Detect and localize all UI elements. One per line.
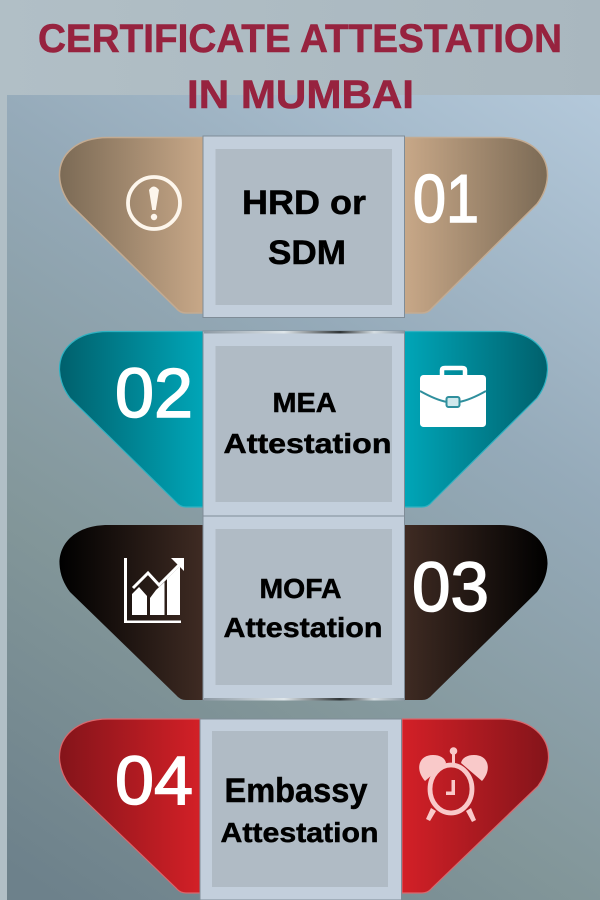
step 4 text box: Attestation [220,817,378,848]
step 1 right wing [404,138,548,313]
icon: briefcase [420,368,486,427]
step 1 left wing [59,138,204,313]
title: IN MUMBAI [187,73,414,117]
step 3 text box [203,516,404,700]
step 1 text box: SDM [268,234,346,272]
step 3 text box: Attestation [224,612,382,643]
step 2 left wing [59,332,204,507]
step 2 text box: MEA [272,387,336,418]
step 4 text box: Embassy [224,772,368,810]
step 4: Embassy Attestation [59,719,549,900]
title: CERTIFICATE ATTESTATION [38,17,562,61]
step 1 text box: HRD or [242,184,366,222]
number 02: 02 [115,354,193,432]
step 3 left wing [59,525,204,700]
step 2 text box [203,331,404,516]
step 2: MEA Attestation [59,331,548,516]
step 3: MOFA Attestation [59,516,548,700]
step 3 right wing [404,525,548,700]
step 4 left wing [59,719,201,893]
step 1: HRD or SDM [59,136,548,318]
icon: alarm clock [419,747,488,822]
number 04: 04 [115,742,193,819]
number 01: 01 [413,161,479,237]
title [38,17,562,117]
step 2 right wing [404,332,548,507]
step 2 text box: Attestation [224,428,392,459]
icon: rising bar chart [124,558,184,623]
step 4 text box [200,719,402,900]
step 4 right wing [402,719,549,893]
icon: exclamation mark in circle [128,177,180,229]
step 3 text box: MOFA [260,573,342,604]
step 1 text box [203,136,404,318]
number 03: 03 [412,548,489,626]
